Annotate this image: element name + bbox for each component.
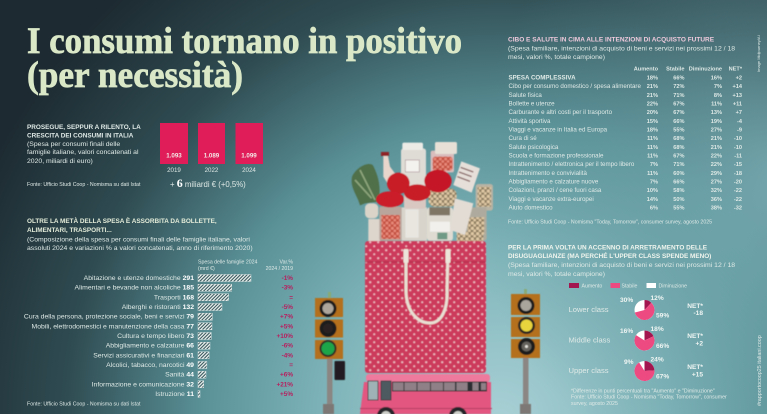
bar chart: spesa per categoria: -1%	[282, 275, 293, 282]
table: intenzioni di acquisto: 21%	[711, 136, 722, 142]
table: intenzioni di acquisto: 18%	[647, 76, 658, 82]
chart: lower class: Lower class	[568, 305, 609, 314]
table: intenzioni di acquisto: 60%	[673, 171, 685, 177]
chart: lower class: 12%	[650, 295, 664, 302]
table: intenzioni di acquisto: Aumento	[634, 66, 659, 72]
column headers	[198, 260, 293, 272]
table: intenzioni di acquisto: 38%	[711, 206, 722, 212]
table: intenzioni di acquisto: Colazioni, pranzi / cene fuori casa	[508, 187, 602, 194]
text block: crescita	[27, 141, 139, 165]
table: intenzioni di acquisto: Aiuto domestico	[508, 204, 553, 212]
column headers: Spesa delle famiglie 2024	[198, 260, 258, 266]
table: intenzioni di acquisto: 68%	[673, 145, 685, 151]
chart: lower class: 59%	[656, 312, 669, 320]
table: intenzioni di acquisto: 20%	[647, 110, 658, 116]
heading: composizione: ALIMENTARI, TRASPORTI...	[27, 227, 112, 234]
table: intenzioni di acquisto: 36%	[711, 197, 722, 203]
bar chart: spesa per categoria: +5%	[280, 391, 293, 398]
bar chart: spesa per categoria: -6%	[282, 343, 293, 350]
icon: bag contents	[352, 142, 493, 242]
table: intenzioni di acquisto: Salute fisica	[508, 92, 542, 99]
table: intenzioni di acquisto: 67%	[673, 102, 685, 108]
heading: intenzioni: CIBO E SALUTE IN CIMA ALLE INTENZIONI DI ACQUISTO FUTURE	[508, 36, 715, 44]
table: intenzioni di acquisto: 14%	[647, 197, 658, 203]
chart: upper class	[568, 356, 703, 381]
table: intenzioni di acquisto: 27%	[711, 180, 722, 186]
table: intenzioni di acquisto: -9	[737, 128, 742, 134]
table: intenzioni di acquisto: 11%	[647, 171, 658, 177]
table: intenzioni di acquisto: -20	[734, 180, 742, 186]
heading: disuguaglianze: DISUGUAGLIANZE (MA PERCHÉ L'UPPER CLASS SPENDE MENO)	[508, 251, 711, 260]
bar chart: consumi: 2019	[167, 167, 181, 174]
table: intenzioni di acquisto: -10	[734, 136, 742, 142]
table: intenzioni di acquisto: 16%	[711, 76, 722, 82]
chart: lower class: NET*	[687, 303, 703, 310]
panel: intenzioni di acquisto	[508, 36, 743, 226]
table: intenzioni di acquisto: +2	[736, 76, 742, 82]
chart: middle class	[568, 326, 703, 350]
chart: upper class: 24%	[650, 356, 664, 364]
chart: lower class: 30%	[620, 297, 633, 304]
table: intenzioni di acquisto: 66%	[673, 76, 685, 82]
bar chart: spesa per categoria: Cura della persona, protezione sociale, beni e servizi 79	[24, 314, 194, 321]
bar chart: spesa per categoria: +5%	[280, 323, 293, 330]
bar chart: spesa per categoria: =	[289, 362, 293, 369]
table: intenzioni di acquisto: 50%	[673, 197, 685, 203]
icon: polka-dot bag	[365, 241, 486, 373]
bar chart: spesa per categoria: -5%	[282, 304, 293, 311]
bar chart: consumi: 1.099	[241, 152, 257, 160]
table: intenzioni di acquisto: 55%	[673, 128, 685, 134]
bar chart: spesa per categoria: Trasporti 168	[154, 294, 194, 301]
table: intenzioni di acquisto: 15%	[647, 119, 658, 125]
table: intenzioni di acquisto: 10%	[647, 188, 658, 194]
source: intenzioni: Fonte: Ufficio Studi Coop - Nomisma "Today, Tomorrow", consumer survey, agosto 2025	[508, 220, 712, 226]
bar chart: spesa per categoria: -4%	[282, 352, 293, 359]
table: intenzioni di acquisto: 11%	[647, 136, 658, 142]
bar chart: consumi: 1.089	[204, 152, 220, 160]
bar chart: spesa per categoria: +6%	[280, 372, 293, 379]
bar chart: consumi: 1.093	[166, 152, 182, 160]
footnote and source: *Differenze in punti percentuali tra "Aumento" e "Diminuzione"	[571, 388, 715, 394]
table: intenzioni di acquisto: Diminuzione	[689, 66, 722, 72]
bar chart: spesa per categoria: Servizi assicurativi e finanziari 61	[93, 352, 194, 359]
title	[27, 21, 462, 96]
table: intenzioni di acquisto: Carburante e altri costi per il trasporto	[508, 109, 613, 116]
bar chart: spesa per categoria: Abbigliamento e calzature 66	[106, 343, 194, 350]
bar chart: consumi: 2024	[242, 167, 256, 174]
table: intenzioni di acquisto: 7%	[650, 162, 658, 168]
bar chart: spesa per categoria: Sanità 44	[165, 372, 194, 379]
table: intenzioni di acquisto: 7%	[714, 84, 722, 90]
table: intenzioni di acquisto: -11	[734, 154, 742, 160]
table: intenzioni di acquisto: Bollette e utenze	[508, 100, 555, 108]
image credit: Image Midjourney/AI	[756, 35, 761, 72]
table: intenzioni di acquisto: -10	[734, 145, 742, 151]
bar chart: spesa per categoria: Alberghi e ristoranti 132	[122, 304, 194, 311]
panel: disuguaglianze	[508, 244, 735, 407]
bar chart: consumi: 2022	[205, 167, 219, 174]
text block: disuguaglianze: mesi, valori %, totale campione)	[508, 271, 605, 278]
table: intenzioni di acquisto: 7%	[650, 180, 658, 186]
table: intenzioni di acquisto: -4	[737, 119, 743, 125]
text block: crescita: 2020, miliardi di euro)	[27, 158, 93, 165]
table: intenzioni di acquisto: 6%	[650, 206, 658, 212]
table: intenzioni di acquisto: 8%	[714, 93, 722, 99]
table: intenzioni di acquisto: 72%	[673, 84, 685, 90]
chart: upper class: 9%	[624, 359, 634, 366]
column headers: (mrd €)	[198, 266, 215, 272]
bar chart: spesa per categoria: Alcolici, tabacco, narcotici 49	[106, 362, 194, 369]
text block: disuguaglianze	[508, 262, 735, 278]
table: intenzioni di acquisto: Scuola e formazione professionale	[508, 152, 604, 160]
table: intenzioni di acquisto: -22	[734, 188, 742, 194]
table: intenzioni di acquisto: 66%	[673, 180, 685, 186]
table: intenzioni di acquisto: Intrattenimento / elettronica per il tempo libero	[508, 161, 635, 168]
chart: middle class: 18%	[650, 326, 664, 333]
icon: traffic light right	[511, 289, 540, 414]
table: intenzioni di acquisto: 67%	[673, 154, 685, 160]
footnote and source: survey, agosto 2025	[571, 401, 618, 407]
chart: upper class: NET*	[687, 364, 703, 371]
chart: lower class	[568, 295, 703, 320]
text block: composizione: (Composizione della spesa per consumi finali delle famiglie italiane, valori	[27, 236, 250, 244]
table: intenzioni di acquisto: SPESA COMPLESSIVA	[508, 74, 576, 82]
column headers: 2024 / 2019	[266, 266, 293, 272]
footnote and source	[571, 388, 727, 407]
heading: composizione: OLTRE LA METÀ DELLA SPESA È ASSORBITA DA BOLLETTE,	[27, 216, 217, 225]
source: composizione: Fonte: Ufficio Studi Coop - Nomisma su dati Istat	[27, 402, 141, 408]
table: intenzioni di acquisto: 29%	[711, 171, 722, 177]
table: intenzioni di acquisto: -18	[734, 171, 742, 177]
table: intenzioni di acquisto: Cibo per consumo domestico / spesa alimentare	[508, 83, 641, 90]
table: intenzioni di acquisto: 22%	[647, 102, 658, 108]
bar chart: spesa per categoria: Informazione e comunicazione 32	[92, 381, 194, 388]
table: intenzioni di acquisto: 27%	[711, 128, 722, 134]
chart: middle class: NET*	[687, 333, 703, 340]
legend	[569, 283, 687, 290]
heading: composizione	[27, 216, 217, 234]
text block: disuguaglianze: (Spesa familiare, intenzioni di acquisto di beni e servizi nei prossimi 12 / 18	[508, 262, 735, 269]
text block: intenzioni	[508, 46, 735, 61]
table: intenzioni di acquisto: +11	[733, 102, 742, 108]
bar chart: spesa per categoria: =	[289, 294, 293, 301]
text block: intenzioni: mesi, valori %, totale campione)	[508, 54, 605, 61]
table: intenzioni di acquisto: 67%	[673, 110, 685, 116]
source: crescita: Fonte: Ufficio Studi Coop - Nomisma su dati Istat	[27, 182, 141, 188]
table: intenzioni di acquisto: Salute psicologica	[508, 144, 559, 151]
bar chart: spesa per categoria	[24, 274, 293, 398]
bar chart: spesa per categoria: Cultura e tempo libero 73	[117, 333, 194, 340]
heading: crescita	[27, 124, 141, 140]
table: intenzioni di acquisto: -32	[734, 206, 742, 212]
bar chart: spesa per categoria: -3%	[282, 285, 293, 292]
hashtag: #rapportocoop25 italiani.coop	[757, 335, 763, 406]
table: intenzioni di acquisto: NET*	[729, 66, 743, 72]
table: intenzioni di acquisto: 11%	[647, 154, 658, 160]
table: intenzioni di acquisto: 11%	[647, 145, 658, 151]
table: intenzioni di acquisto: Viaggi e vacanze extra-europei	[508, 196, 594, 203]
table: intenzioni di acquisto: +14	[732, 84, 743, 90]
chart: middle class: +2	[695, 340, 703, 348]
table: intenzioni di acquisto: 58%	[673, 188, 685, 194]
table: intenzioni di acquisto: 32%	[711, 188, 722, 194]
table: intenzioni di acquisto: 19%	[711, 119, 722, 125]
chart: upper class: Upper class	[568, 366, 609, 375]
table: intenzioni di acquisto: -22	[734, 197, 742, 203]
bar chart: spesa per categoria: +7%	[280, 314, 293, 321]
table: intenzioni di acquisto: +13	[732, 93, 742, 99]
table: intenzioni di acquisto: 71%	[673, 162, 685, 168]
table: intenzioni di acquisto: 22%	[711, 162, 722, 168]
table: intenzioni di acquisto: 21%	[647, 93, 658, 99]
table: intenzioni di acquisto	[508, 66, 743, 212]
icon: traffic light left	[315, 292, 345, 414]
legend: Diminuzione	[658, 284, 687, 290]
callout: +6 miliardi: + 6 miliardi € (+0,5%)	[170, 176, 246, 190]
table: intenzioni di acquisto: 11%	[711, 102, 722, 108]
table: intenzioni di acquisto: 66%	[673, 119, 685, 125]
chart: middle class: 16%	[620, 328, 633, 335]
bar chart: spesa per categoria: Istruzione 11	[155, 391, 194, 398]
text block: composizione	[27, 236, 253, 252]
table: intenzioni di acquisto: 71%	[673, 93, 685, 99]
table: intenzioni di acquisto: Abbigliamento e calzature nuove	[508, 178, 599, 186]
bar chart: spesa per categoria: Mobili, elettrodomestici e manutenzione della casa 77	[32, 323, 194, 330]
legend: Aumento	[582, 284, 602, 290]
table: intenzioni di acquisto: 55%	[673, 206, 685, 212]
table: intenzioni di acquisto: 22%	[711, 154, 722, 160]
panel: composizione della spesa	[24, 216, 293, 408]
title: I consumi tornano in positivo	[27, 21, 462, 62]
table: intenzioni di acquisto: 21%	[647, 84, 658, 90]
bar chart: spesa per categoria: Alimentari e bevande non alcoliche 185	[75, 285, 194, 292]
chart: lower class: -18	[693, 310, 703, 317]
table: intenzioni di acquisto: +7	[736, 110, 742, 116]
text block: crescita: (Spesa per consumi finali delle	[27, 141, 120, 148]
chart: upper class: 67%	[656, 374, 669, 380]
table: intenzioni di acquisto: Viaggi e vacanze in Italia ed Europa	[508, 126, 608, 134]
table: intenzioni di acquisto: Attività sportiva	[508, 118, 551, 125]
heading: crescita: PROSEGUE, SEPPUR A RILENTO, LA	[27, 124, 141, 131]
bar chart: spesa per categoria: Abitazione e utenze domestiche 291	[84, 275, 194, 282]
bar chart: consumi	[160, 123, 263, 174]
chart: upper class: +15	[692, 372, 703, 378]
table: intenzioni di acquisto: -15	[734, 162, 742, 168]
table: intenzioni di acquisto: Stabile	[666, 66, 684, 72]
heading: disuguaglianze	[508, 244, 711, 260]
table: intenzioni di acquisto: Cura di sé	[508, 135, 537, 142]
legend: Stabile	[622, 284, 637, 290]
heading: disuguaglianze: PER LA PRIMA VOLTA UN ACCENNO DI ARRETRAMENTO DELLE	[508, 244, 708, 252]
illustration: shopping bag with food and medicine on a bus	[315, 142, 540, 414]
table: intenzioni di acquisto: 68%	[673, 136, 685, 142]
table: intenzioni di acquisto: 18%	[647, 128, 658, 134]
icon: pink bus	[360, 374, 492, 414]
text block: crescita: famiglie italiane, valori concatenati al	[27, 149, 139, 156]
chart: middle class: Middle class	[568, 336, 610, 344]
footnote and source: Fonte: Ufficio Studi Coop - Nomisma "Today, Tomorrow", consumer	[571, 394, 727, 400]
bar chart: spesa per categoria: +21%	[276, 381, 293, 388]
chart: middle class: 66%	[656, 343, 669, 350]
table: intenzioni di acquisto: 21%	[711, 145, 722, 151]
bar chart: spesa per categoria: +10%	[276, 333, 293, 340]
title: (per necessità)	[27, 55, 243, 96]
column headers: Var.%	[280, 260, 293, 266]
text block: composizione: assoluti 2024 e variazioni % a valori concatenati, anno di riferimento 2020)	[27, 245, 253, 252]
table: intenzioni di acquisto: Intrattenimento e convivialità	[508, 170, 587, 177]
text block: intenzioni: (Spesa familiare, intenzioni di acquisto di beni e servizi nei prossimi 12 / 18	[508, 46, 735, 52]
panel: crescita dei consumi	[27, 123, 263, 190]
table: intenzioni di acquisto: 13%	[711, 110, 722, 116]
heading: crescita: CRESCITA DEI CONSUMI IN ITALIA	[27, 132, 134, 140]
